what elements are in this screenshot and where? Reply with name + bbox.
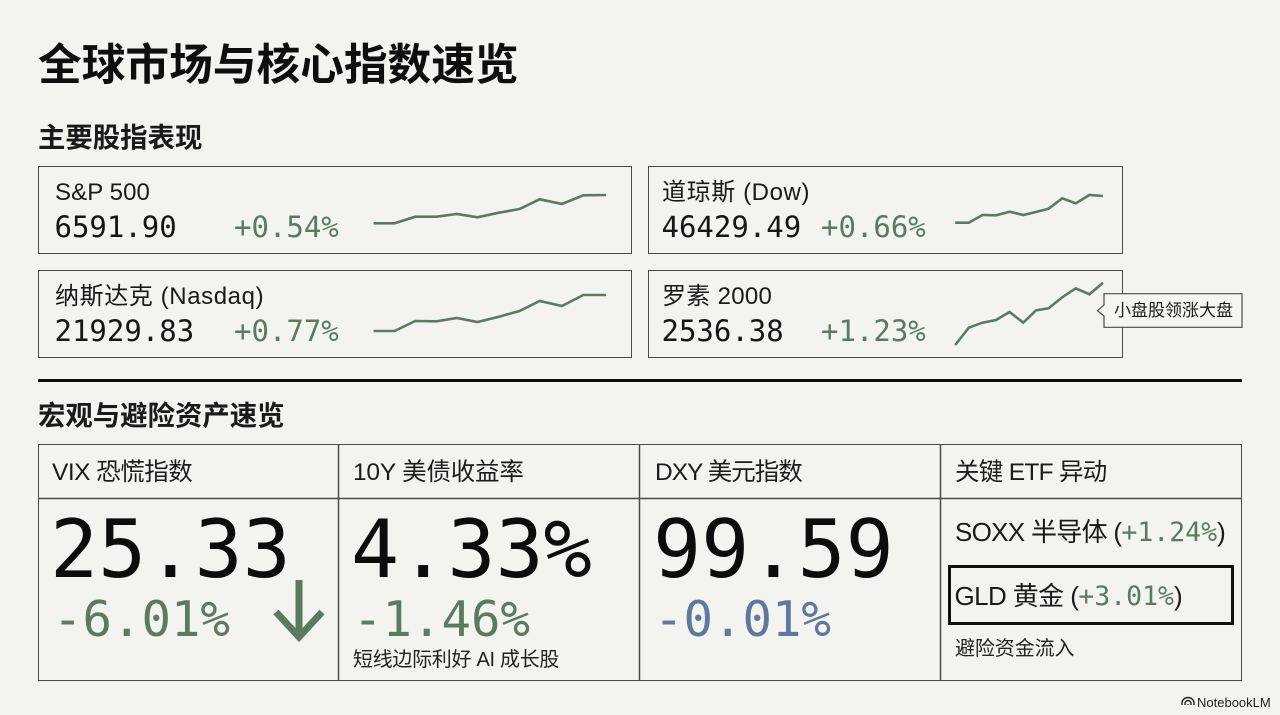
section divider — [38, 378, 1242, 382]
DXY header: DXY 美元指数 — [655, 459, 802, 486]
title: 全球市场与核心指数速览 — [38, 41, 519, 90]
DXY change: -0.01% — [654, 591, 831, 648]
Nasdaq sparkline — [374, 294, 606, 332]
S&P 500 change: +0.54% — [234, 210, 339, 244]
Russell 2000 value: 2536.38 — [662, 314, 784, 348]
SOXX row: SOXX 半导体 (+1.24%) — [955, 517, 1225, 548]
GLD note: 避险资金流入 — [955, 638, 1074, 660]
10Y header: 10Y 美债收益率 — [353, 459, 524, 486]
callout text: 小盘股领涨大盘 — [1114, 301, 1233, 320]
ETF header: 关键 ETF 异动 — [955, 459, 1107, 486]
VIX value: 25.33 — [50, 503, 291, 596]
10Y change: -1.46% — [353, 591, 530, 648]
Russell 2000 sparkline — [954, 282, 1104, 346]
Dow change: +0.66% — [821, 210, 926, 244]
VIX header: VIX 恐慌指数 — [52, 459, 192, 486]
heading: macro and safe-haven assets: 宏观与避险资产速览 — [38, 400, 285, 431]
Nasdaq value: 21929.83 — [54, 314, 194, 348]
icon: down arrow — [274, 580, 324, 642]
panel: Nasdaq card — [38, 270, 632, 358]
GLD highlight box — [948, 565, 1234, 625]
heading: major stock indices: 主要股指表现 — [38, 122, 202, 153]
icon: NotebookLM arcs — [1181, 696, 1195, 705]
S&P 500 value: 6591.90 — [54, 210, 177, 244]
footer: NotebookLM logo — [1181, 694, 1271, 710]
Russell 2000 change: +1.23% — [821, 314, 926, 348]
10Y value: 4.33% — [351, 503, 592, 596]
Dow sparkline — [955, 194, 1104, 224]
panel: S&P 500 card — [38, 166, 632, 254]
panel: macro table — [38, 444, 1242, 681]
10Y note: 短线边际利好 AI 成长股 — [353, 649, 559, 671]
Nasdaq label: 纳斯达克 (Nasdaq) — [55, 283, 264, 310]
Dow value: 46429.49 — [662, 210, 801, 244]
brand name: NotebookLM — [1197, 694, 1271, 710]
panel: Dow card — [648, 166, 1123, 254]
callout: small caps lead — [1096, 293, 1243, 328]
Russell 2000 label: 罗素 2000 — [662, 283, 772, 310]
S&P 500 sparkline — [374, 194, 606, 225]
DXY value: 99.59 — [653, 503, 894, 596]
panel: Russell 2000 card — [648, 270, 1123, 358]
VIX change: -6.01% — [53, 591, 230, 648]
Nasdaq change: +0.77% — [234, 314, 339, 348]
table grid lines — [39, 445, 1241, 680]
S&P 500 label: S&P 500 — [55, 179, 150, 206]
GLD row: GLD 黄金 (+3.01%) — [954, 580, 1182, 612]
Dow label: 道琼斯 (Dow) — [662, 179, 810, 206]
